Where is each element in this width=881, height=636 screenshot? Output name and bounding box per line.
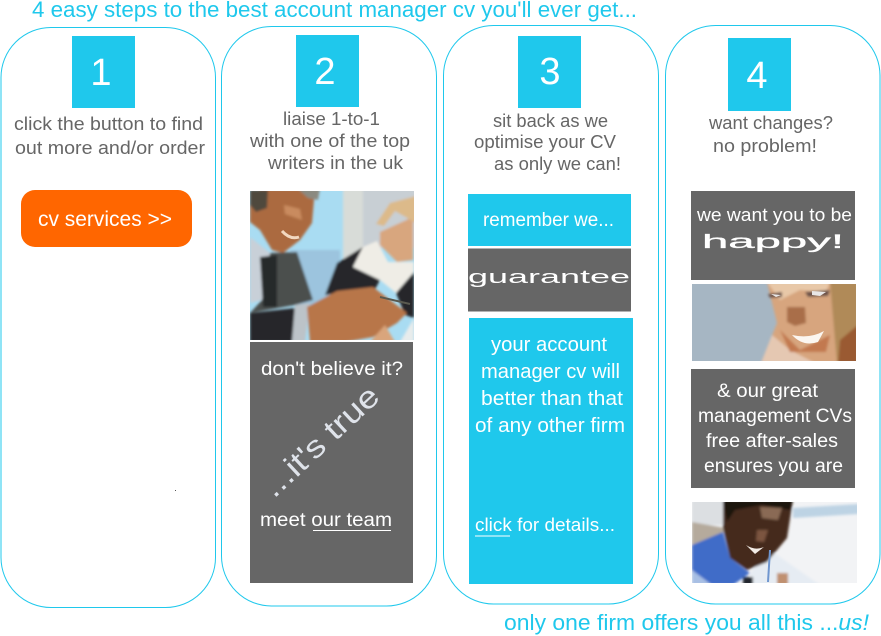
panel: step 3	[444, 26, 658, 604]
text: step 2 description: with one of the top	[249, 131, 410, 151]
panel: step 1	[1, 28, 216, 608]
button: cv services: cv services >>	[38, 208, 172, 231]
text: step 3 description: as only we can!	[494, 154, 621, 174]
callout: don't believe it: don't believe it?	[261, 359, 403, 380]
callout: great management CVs: free after-sales	[706, 431, 838, 452]
callout: don't believe it: ...it's true	[255, 378, 386, 504]
icon: number 1: 1	[90, 52, 112, 94]
callout: great management CVs: management CVs	[698, 406, 852, 427]
photo: smiling man	[692, 500, 859, 585]
callout: great management CVs	[691, 369, 855, 488]
button: cv services	[21, 190, 192, 247]
banner: we want you to be happy: we want you to be	[696, 205, 852, 225]
panel: step 4	[666, 26, 880, 604]
icon: number 1	[72, 36, 135, 108]
icon: number 3	[518, 36, 581, 108]
icon: number 2	[296, 35, 359, 107]
decorative speck	[175, 490, 176, 491]
callout: don't believe it: meet our team	[260, 510, 392, 531]
icon: number 2: 2	[314, 51, 336, 93]
callout: better than any other firm: click for details...	[475, 515, 615, 535]
text: step 4 description: no problem!	[713, 136, 817, 156]
banner: remember we	[468, 194, 631, 246]
footer tagline: only one firm offers you all this ... us!	[504, 610, 869, 635]
callout: great management CVs: & our great	[717, 381, 819, 402]
banner: guarantee: guarantee	[468, 267, 630, 287]
icon: number 3: 3	[539, 51, 561, 93]
text: step 3 description: sit back as we	[493, 111, 608, 131]
text: step 1 description	[14, 114, 205, 158]
text: step 3 description	[474, 111, 621, 174]
photo: two colleagues reviewing a document	[250, 188, 417, 342]
text: step 3 description: optimise your CV	[474, 132, 616, 152]
photo: smiling woman	[692, 282, 858, 363]
text: step 4 description: want changes?	[708, 113, 833, 133]
text: step 2 description: liaise 1-to-1	[283, 109, 380, 129]
banner: we want you to be happy	[691, 191, 855, 280]
callout: better than any other firm: manager cv will	[481, 361, 620, 383]
text: step 1 description: out more and/or order	[15, 138, 205, 158]
text: step 1 description: click the button to find	[14, 114, 203, 134]
text: step 2 description	[249, 109, 410, 173]
callout: better than any other firm	[469, 318, 633, 584]
callout: better than any other firm: your account	[491, 334, 607, 356]
callout: better than any other firm: better than that	[481, 388, 623, 410]
text: step 4 description	[708, 113, 833, 156]
banner: remember we: remember we...	[483, 210, 614, 231]
callout: great management CVs: ensures you are	[704, 456, 843, 477]
icon: number 4: 4	[746, 55, 768, 97]
banner: guarantee	[468, 248, 631, 312]
icon: number 4	[728, 38, 791, 111]
banner: we want you to be happy: happy!	[702, 232, 844, 253]
panel: step 2	[222, 26, 436, 606]
callout: don't believe it	[250, 342, 413, 583]
text: step 2 description: writers in the uk	[267, 153, 404, 173]
callout: better than any other firm: of any other firm	[475, 415, 625, 437]
